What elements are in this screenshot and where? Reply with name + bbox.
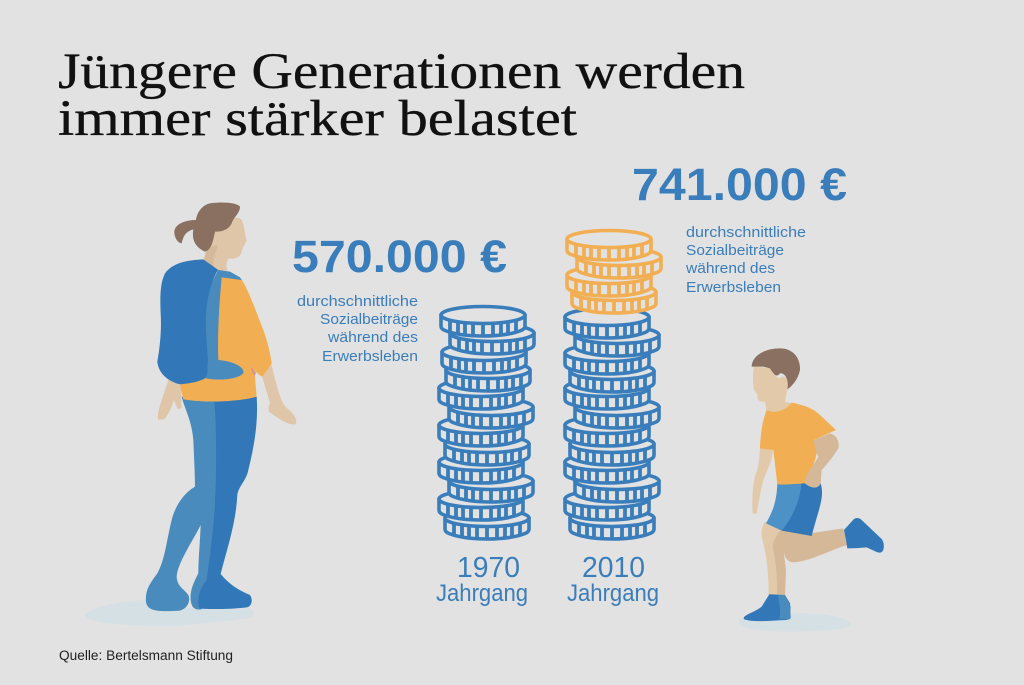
value 1970: 570.000 € [292, 231, 507, 282]
shadow under child [738, 613, 851, 632]
caption 2010: Sozialbeiträge [686, 242, 784, 259]
orange coins [567, 230, 661, 313]
caption 2010: während des [685, 260, 775, 277]
coin stack 2010 [565, 230, 661, 539]
label 2010 [567, 552, 659, 607]
caption 1970: Sozialbeiträge [320, 311, 418, 328]
child rear leg [773, 527, 847, 597]
figure: adult with backpack [85, 203, 296, 626]
figure: running child [738, 348, 884, 632]
label 2010: 2010 [582, 552, 645, 584]
label 2010: Jahrgang [567, 580, 659, 607]
title: Jüngere Generationen werden [58, 44, 745, 100]
caption 1970: während des [327, 329, 418, 346]
source: Quelle: Bertelsmann Stiftung [59, 648, 233, 663]
caption 1970: Erwerbsleben [322, 348, 418, 365]
caption 1970: durchschnittliche [297, 293, 418, 310]
label 1970: Jahrgang [436, 580, 528, 607]
label 1970: 1970 [457, 552, 520, 584]
caption 1970 [297, 293, 418, 365]
value 2010: 741.000 € [632, 159, 847, 210]
child shirt [760, 403, 836, 484]
child shorts [766, 482, 822, 536]
label 1970 [436, 552, 528, 607]
blue coins [565, 308, 659, 539]
title: immer stärker belastet [58, 91, 577, 147]
adult upper body [157, 203, 296, 424]
title [58, 44, 745, 147]
child raised shoe [844, 518, 884, 553]
child standing shoe [744, 594, 791, 621]
caption 2010: durchschnittliche [686, 224, 806, 241]
coin stack 1970 [439, 306, 534, 539]
caption 2010 [685, 224, 806, 296]
child left arm [752, 447, 773, 514]
child head [752, 348, 800, 413]
child front leg [762, 522, 782, 597]
shadow under adult [85, 600, 254, 626]
adult legs [146, 397, 257, 611]
child right arm [805, 433, 839, 488]
caption 2010: Erwerbsleben [686, 279, 781, 296]
